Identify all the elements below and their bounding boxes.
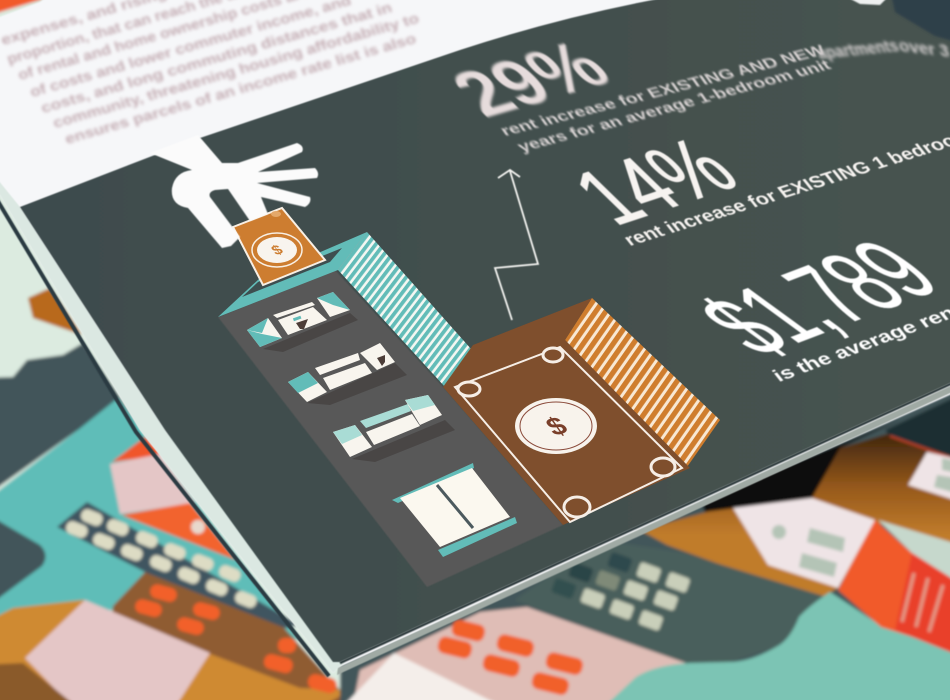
background: red house stripes (902, 573, 943, 632)
background: teal field (0, 398, 300, 640)
background: red house (838, 520, 950, 655)
dollar sign: $ (540, 411, 573, 441)
page edge strip (0, 170, 345, 673)
icon: small banknote: $ (268, 242, 287, 258)
body text block on white page: costs, and long commuting distances that in (39, 0, 394, 117)
background: dark brown shadow (0, 663, 93, 700)
29% description: rent increase for EXISTING AND NEW (498, 43, 830, 140)
icon: money stack (443, 298, 720, 525)
background: brown building (100, 570, 340, 700)
building striped side (338, 232, 472, 387)
number $1,789: $1,789 (673, 223, 950, 372)
window row 1 (247, 292, 358, 352)
14% description: rent increase for EXISTING 1 bedroom (619, 125, 950, 249)
window row 3 (333, 395, 455, 462)
icon: white hand (150, 135, 318, 248)
top right sliver of white page (843, 0, 890, 5)
window row 2 (288, 343, 407, 405)
background: white house lower (330, 653, 530, 700)
background: orange house (0, 600, 350, 700)
stack top and banknote face (443, 298, 690, 525)
background: red roof (112, 437, 165, 462)
banknote corner rings (458, 348, 675, 517)
background: dark teal roofline (0, 343, 150, 500)
background: brown band (640, 433, 950, 600)
29% description: years for an average 1-bedroom unit (515, 58, 835, 156)
background: house at right edge (908, 452, 950, 505)
door (392, 463, 517, 557)
stat: $1,789 (673, 223, 950, 385)
banknote border (455, 347, 682, 522)
stat: 14% (552, 122, 950, 249)
background: pink house (110, 454, 195, 514)
number 29%: 29% (434, 28, 627, 131)
background: pink building (350, 607, 686, 700)
coin (515, 398, 597, 454)
building roof (218, 232, 367, 317)
background: pink building windows (436, 618, 584, 696)
body text block on white page: community, threatening housing affordability to (51, 11, 422, 132)
roof slot opening (242, 248, 342, 297)
background: house windows (772, 525, 845, 577)
number 14%: 14% (552, 122, 758, 240)
background: pale roof (878, 520, 950, 590)
background: dark blob (0, 510, 46, 612)
background: teal field lower right (590, 592, 950, 700)
building front wall (218, 270, 563, 587)
29% description: apartments (814, 36, 902, 63)
bottom edge grey strip (337, 377, 950, 675)
background: darker red panel (895, 553, 950, 660)
page edge shadow (0, 198, 329, 676)
background: pink rectangle (25, 600, 210, 700)
$1,789 description: is the average rent (768, 300, 950, 385)
icon: small banknote (233, 208, 325, 285)
background: dark panel (515, 540, 830, 663)
body text block on white page (0, 0, 422, 148)
stat: 29% (434, 28, 950, 156)
background: dark panel windows (551, 552, 691, 631)
background: window band lights (64, 507, 258, 610)
icon: building with money (218, 232, 563, 587)
29% description (498, 35, 950, 156)
background: brown shape upper left (28, 288, 82, 335)
background: lower right base (340, 375, 950, 700)
background: red line (890, 436, 950, 461)
background: red corner (0, 0, 70, 18)
body text block on white page: of costs and lower commuter income, and (28, 0, 353, 101)
background: white house right (733, 498, 875, 588)
background: orange windows (134, 583, 338, 695)
bottom edge dark line (340, 375, 950, 663)
top right darker corner (888, 0, 950, 46)
29% description: over 3 (897, 35, 950, 61)
background: shadow under page (700, 420, 900, 512)
arrow: rising line (495, 170, 538, 320)
background: dark corner under page (885, 390, 950, 462)
body text block on white page: ensures parcels of an income rate list is also (63, 31, 419, 148)
stack striped side (565, 298, 720, 467)
background: red wall (122, 503, 236, 560)
background: dark window band (57, 502, 300, 628)
